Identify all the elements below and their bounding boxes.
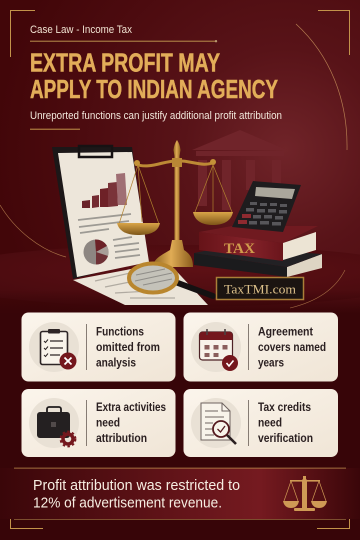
label: Extra activities: [96, 400, 166, 414]
website badge: [216, 278, 304, 300]
balance scale: [117, 140, 233, 267]
icon: checklist with cross: [40, 329, 76, 370]
conclusion text: [33, 478, 240, 512]
label: need: [96, 416, 120, 430]
clipboard: [52, 146, 149, 279]
label: need: [258, 416, 282, 430]
panel: conclusion band: [0, 468, 360, 520]
panel: agreement years: [184, 312, 338, 382]
pie chart: [84, 239, 109, 265]
panel: tax credits: [184, 389, 338, 457]
category label: Case Law - Income Tax: [30, 24, 132, 36]
panel: extra activities: [22, 389, 176, 457]
label: Functions: [96, 325, 144, 339]
icon: briefcase with gear: [37, 407, 76, 446]
subtitle: Unreported functions can justify additional profit attribution: [30, 110, 282, 122]
conclusion text: 12% of advertisement revenue.: [33, 496, 222, 512]
label: attribution: [96, 431, 147, 445]
courthouse silhouette: [192, 130, 287, 210]
label: Agreement: [258, 325, 313, 339]
icon: scales: [283, 476, 327, 511]
short accent rule: [30, 129, 80, 130]
upper tax book: [199, 226, 318, 261]
icon: document with magnifier: [201, 403, 236, 444]
label: Tax credits: [258, 400, 311, 414]
label: [96, 400, 166, 445]
bar chart: [82, 173, 127, 208]
website badge: TaxTMI.com: [224, 282, 296, 296]
conclusion text: Profit attribution was restricted to: [33, 478, 240, 494]
rule under category: [30, 40, 217, 42]
hero illustration: [52, 130, 322, 305]
label: omitted from: [96, 340, 160, 354]
magnifying glass: [129, 264, 213, 296]
upper tax book: TAX: [224, 241, 255, 257]
label: verification: [258, 431, 313, 445]
panel: functions omitted: [22, 312, 176, 382]
label: [96, 325, 160, 370]
title: [30, 50, 278, 104]
icon: calendar with check: [200, 329, 238, 371]
report sheet: [73, 262, 208, 305]
label: [258, 325, 326, 370]
label: years: [258, 356, 284, 370]
calculator: [232, 181, 301, 232]
title: APPLY TO INDIAN AGENCY: [30, 76, 278, 104]
label: [258, 400, 313, 445]
label: analysis: [96, 356, 136, 370]
lower dark book: [194, 247, 322, 277]
label: covers named: [258, 340, 326, 354]
title: EXTRA PROFIT MAY: [30, 50, 220, 78]
